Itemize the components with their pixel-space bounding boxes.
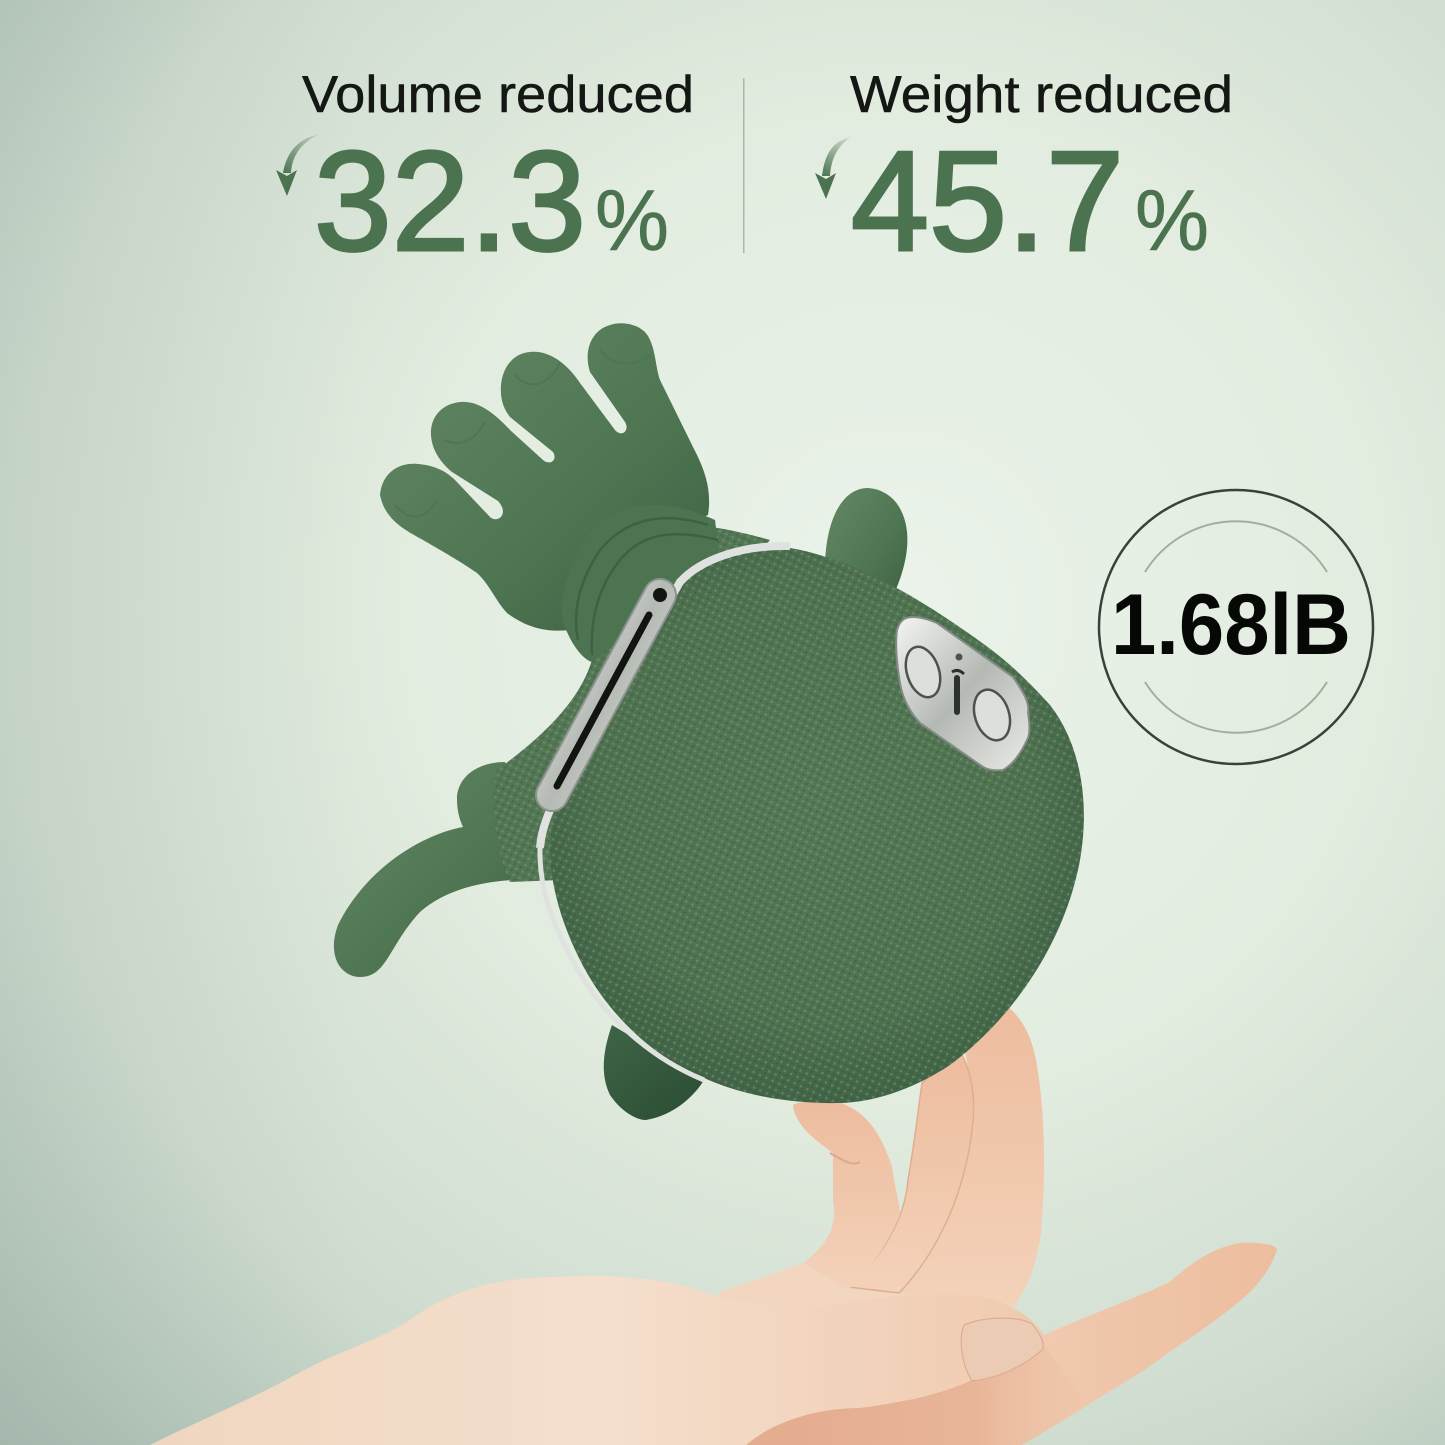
upper hand: [380, 323, 720, 662]
slot plate: [552, 588, 667, 795]
heading: volume reduced: Volume reduced: [302, 66, 694, 124]
ring finger: [793, 1101, 900, 1290]
value: 45.7: 45.7: [851, 122, 1124, 281]
back of hand and thumb: [150, 1243, 1277, 1445]
product: green massager: [334, 323, 1084, 1120]
divider: [743, 78, 744, 253]
metal band: [540, 546, 790, 1080]
unit: percent: %: [595, 173, 669, 269]
left button: [900, 642, 946, 702]
middle finger: [848, 1055, 974, 1293]
right button: [968, 685, 1016, 745]
stat: weight reduced: [815, 66, 1233, 281]
finger nails: [395, 350, 650, 516]
heading: weight reduced: Weight reduced: [850, 66, 1233, 124]
fabric neck: [494, 526, 770, 882]
thumb nail: [961, 1318, 1043, 1381]
wrist ribs: [562, 505, 720, 662]
icon: down arrow: [276, 134, 320, 196]
center mark: [952, 654, 964, 712]
knuckle creases: [830, 1153, 860, 1164]
rear nub: [825, 488, 907, 610]
unit: percent: %: [1135, 173, 1209, 269]
weight badge: [1099, 490, 1373, 764]
palm behind fingers: [717, 1263, 1015, 1340]
icon: down arrow: [815, 137, 851, 199]
control panel: [896, 617, 1029, 770]
stat: volume reduced: [276, 66, 694, 281]
index finger: [899, 1004, 1044, 1305]
value: 32.3: 32.3: [314, 122, 586, 281]
fabric body: [550, 548, 1084, 1103]
weight value: 1.68lB: [1111, 577, 1351, 673]
lower nub: [604, 1025, 704, 1120]
lower arm: [334, 762, 545, 977]
supporting hand: [150, 1004, 1277, 1445]
palm shadow: [746, 1343, 1090, 1445]
